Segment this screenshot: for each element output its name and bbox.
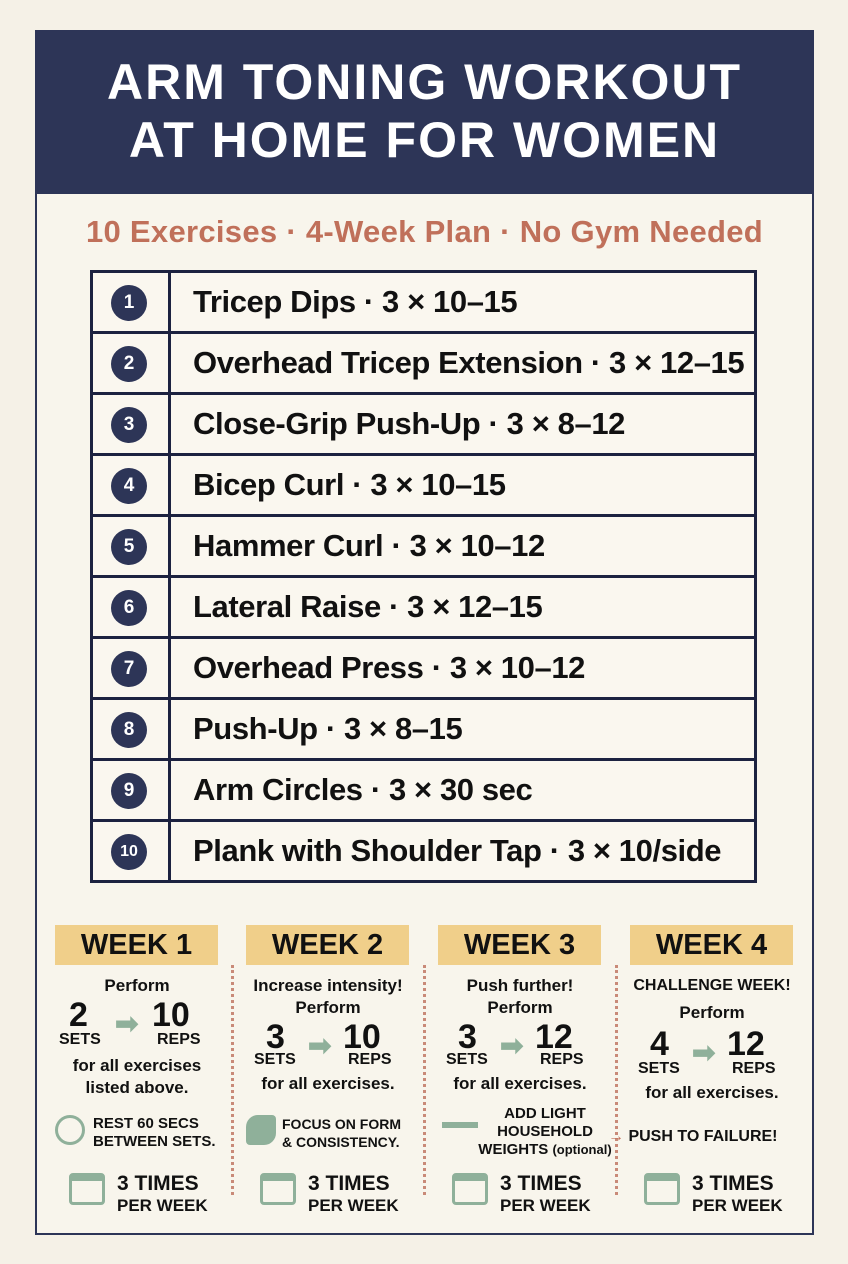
row 7: 7: [124, 658, 134, 679]
focus note: FOCUS ON FORM: [282, 1116, 401, 1132]
weights note: WEIGHTS (optional): [478, 1141, 612, 1158]
row 4: Bicep Curl · 3 × 10–15: [193, 467, 506, 502]
week 3 text: Push further!: [467, 976, 573, 995]
week 1 text: 10: [152, 996, 190, 1034]
rest note: BETWEEN SETS.: [93, 1133, 216, 1150]
subtitle: 10 Exercises · 4-Week Plan · No Gym Needed: [86, 214, 763, 249]
week 2: PER WEEK: [308, 1196, 399, 1215]
week 1 text: REPS: [157, 1031, 201, 1048]
row 9: [93, 761, 754, 822]
row 7: [93, 639, 754, 700]
focus note: & CONSISTENCY.: [282, 1134, 399, 1150]
week 1 text: for all exercises: [73, 1056, 201, 1075]
focus note: [282, 1116, 401, 1150]
week 4: [608, 925, 793, 1215]
week 1: 3 TIMES: [117, 1172, 199, 1195]
icon arm: [246, 1115, 276, 1145]
row 3: 3: [124, 414, 134, 435]
row 7: Overhead Press · 3 × 10–12: [193, 650, 585, 685]
week 1 text: [59, 976, 201, 1097]
title: ARM TONING WORKOUT: [107, 54, 742, 110]
week 3: PER WEEK: [500, 1196, 591, 1215]
row 9: Arm Circles · 3 × 30 sec: [193, 772, 532, 807]
week 3 text: REPS: [540, 1051, 584, 1068]
row 1: 1: [124, 292, 134, 313]
icon dumbbell: [442, 1122, 478, 1128]
week 3 text: 12: [535, 1018, 573, 1056]
row 6: 6: [124, 597, 134, 618]
row 8: 8: [124, 719, 134, 740]
week 3: [438, 925, 612, 1215]
week 2 text: 3: [266, 1018, 285, 1056]
week 3 text: Perform: [487, 998, 553, 1017]
week 2 heading: WEEK 2: [272, 929, 383, 961]
week 2 text: REPS: [348, 1051, 392, 1068]
week 4 text: ➡: [692, 1037, 715, 1068]
week 4: 3 TIMES: [692, 1172, 774, 1195]
rest note: [93, 1115, 216, 1150]
week 4 text: 4: [650, 1025, 669, 1063]
week 1: [55, 925, 218, 1215]
week 3 text: ➡: [500, 1030, 523, 1061]
week 1 text: SETS: [59, 1031, 101, 1048]
week 2 heading: [246, 925, 409, 965]
week 4: PER WEEK: [692, 1196, 783, 1215]
week 1 heading: [55, 925, 218, 965]
calendar & frequency: [452, 1173, 488, 1205]
row 1: [93, 273, 754, 334]
week 3 heading: [438, 925, 601, 965]
row 10: 10: [120, 843, 138, 860]
week 1 text: ➡: [115, 1008, 138, 1039]
week 1 text: listed above.: [86, 1078, 188, 1097]
week 2 text: ➡: [308, 1030, 331, 1061]
week 3 text: SETS: [446, 1051, 488, 1068]
row 8: Push-Up · 3 × 8–15: [193, 711, 462, 746]
calendar & frequency: [260, 1173, 296, 1205]
row 10: Plank with Shoulder Tap · 3 × 10/side: [193, 833, 721, 868]
row 8: [93, 700, 754, 761]
row 6: [93, 578, 754, 639]
title: [35, 30, 814, 194]
row 5: Hammer Curl · 3 × 10–12: [193, 528, 545, 563]
calendar & frequency: [644, 1173, 680, 1205]
row 3: [93, 395, 754, 456]
row 2: 2: [124, 353, 134, 374]
week 1 text: Perform: [104, 976, 170, 995]
week 2: [246, 925, 409, 1215]
week 3 text: for all exercises.: [453, 1074, 587, 1093]
week 1 heading: WEEK 1: [81, 929, 192, 961]
row 2: Overhead Tricep Extension · 3 × 12–15: [193, 345, 744, 380]
row 5: 5: [124, 536, 134, 557]
calendar & frequency: [69, 1173, 105, 1205]
week 4 text: 12: [727, 1025, 765, 1063]
week 1: PER WEEK: [117, 1196, 208, 1215]
row 5: [93, 517, 754, 578]
week 3 heading: WEEK 3: [464, 929, 575, 961]
row 3: Close-Grip Push-Up · 3 × 8–12: [193, 406, 625, 441]
week 2 text: SETS: [254, 1051, 296, 1068]
exercise table: [90, 270, 757, 883]
week 3 text: 3: [458, 1018, 477, 1056]
icon stopwatch: [55, 1115, 85, 1145]
week 4 text: REPS: [732, 1060, 776, 1077]
week 4 heading: [630, 925, 793, 965]
title: AT HOME FOR WOMEN: [129, 112, 720, 168]
weights note: HOUSEHOLD: [497, 1123, 593, 1140]
row 4: [93, 456, 754, 517]
row 9: 9: [124, 780, 134, 801]
week 3: 3 TIMES: [500, 1172, 582, 1195]
row 2: [93, 334, 754, 395]
week 2 text: [253, 976, 403, 1093]
week 4 heading: WEEK 4: [656, 929, 767, 961]
week 2 text: 10: [343, 1018, 381, 1056]
week 4 text: SETS: [638, 1060, 680, 1077]
week 2 text: for all exercises.: [261, 1074, 395, 1093]
row 6: Lateral Raise · 3 × 12–15: [193, 589, 542, 624]
week 4 text: Perform: [679, 1003, 745, 1022]
row 1: Tricep Dips · 3 × 10–15: [193, 284, 517, 319]
week 2: 3 TIMES: [308, 1172, 390, 1195]
week 4 text: [633, 977, 791, 1102]
weights note: ADD LIGHT: [504, 1105, 586, 1122]
week 2 text: Perform: [295, 998, 361, 1017]
week 3 text: [446, 976, 587, 1093]
push to failure callout: → PUSH TO FAILURE!: [608, 1128, 778, 1145]
week 4 text: for all exercises.: [645, 1083, 779, 1102]
weights note: [478, 1105, 612, 1158]
week 4 text: CHALLENGE WEEK!: [633, 977, 791, 994]
rest note: REST 60 SECS: [93, 1115, 199, 1132]
week 2 text: Increase intensity!: [253, 976, 403, 995]
row 4: 4: [124, 475, 134, 496]
week 1 text: 2: [69, 996, 88, 1034]
